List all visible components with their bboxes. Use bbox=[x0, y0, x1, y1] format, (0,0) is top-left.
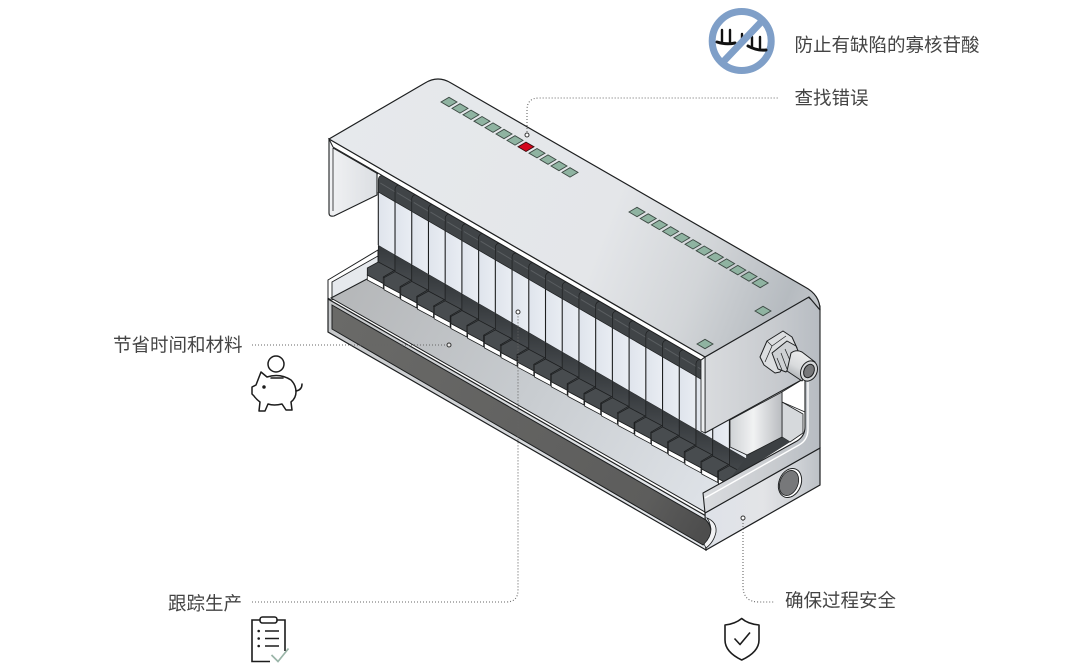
underside strip bbox=[329, 139, 705, 360]
front base face bbox=[328, 299, 706, 550]
cylinder bbox=[730, 392, 782, 455]
dark interior behind end window bbox=[705, 430, 790, 482]
floor plate bbox=[331, 279, 740, 512]
window behind end frame bbox=[782, 378, 805, 412]
LED row 2 bbox=[629, 207, 771, 349]
label: prevent defective oligonucleotides: 防止有缺陷的寡核苷酸 bbox=[794, 34, 980, 56]
half-round channel end bbox=[704, 518, 716, 548]
callout: find errors: 查找错误 bbox=[794, 88, 869, 108]
end frame bbox=[703, 297, 820, 513]
callout: find errors bbox=[525, 88, 869, 137]
icon: piggy bank bbox=[252, 356, 302, 411]
top cover bbox=[329, 79, 820, 357]
callout: save time and materials: 节省时间和材料 bbox=[113, 334, 243, 356]
left flap bbox=[329, 139, 377, 216]
callout: save time and materials bbox=[113, 334, 451, 356]
callout: track production bbox=[168, 310, 520, 614]
icon: shield with check bbox=[725, 618, 759, 660]
end strip bbox=[701, 357, 705, 433]
icon: clipboard checklist bbox=[252, 617, 288, 662]
callout: ensure process safety bbox=[741, 516, 897, 611]
callout: ensure process safety: 确保过程安全 bbox=[785, 590, 897, 611]
LED row 1 with red error indicator bbox=[441, 97, 578, 177]
panel: valve block assembly illustration bbox=[328, 79, 821, 550]
threaded fitting bbox=[760, 331, 821, 384]
callout: track production: 跟踪生产 bbox=[168, 593, 242, 614]
modules row bbox=[367, 175, 749, 492]
dark band bbox=[332, 305, 711, 545]
end of base with hole bbox=[705, 448, 820, 550]
icon: no defective oligonucleotides bbox=[712, 12, 771, 70]
back rim wall bbox=[328, 250, 378, 300]
